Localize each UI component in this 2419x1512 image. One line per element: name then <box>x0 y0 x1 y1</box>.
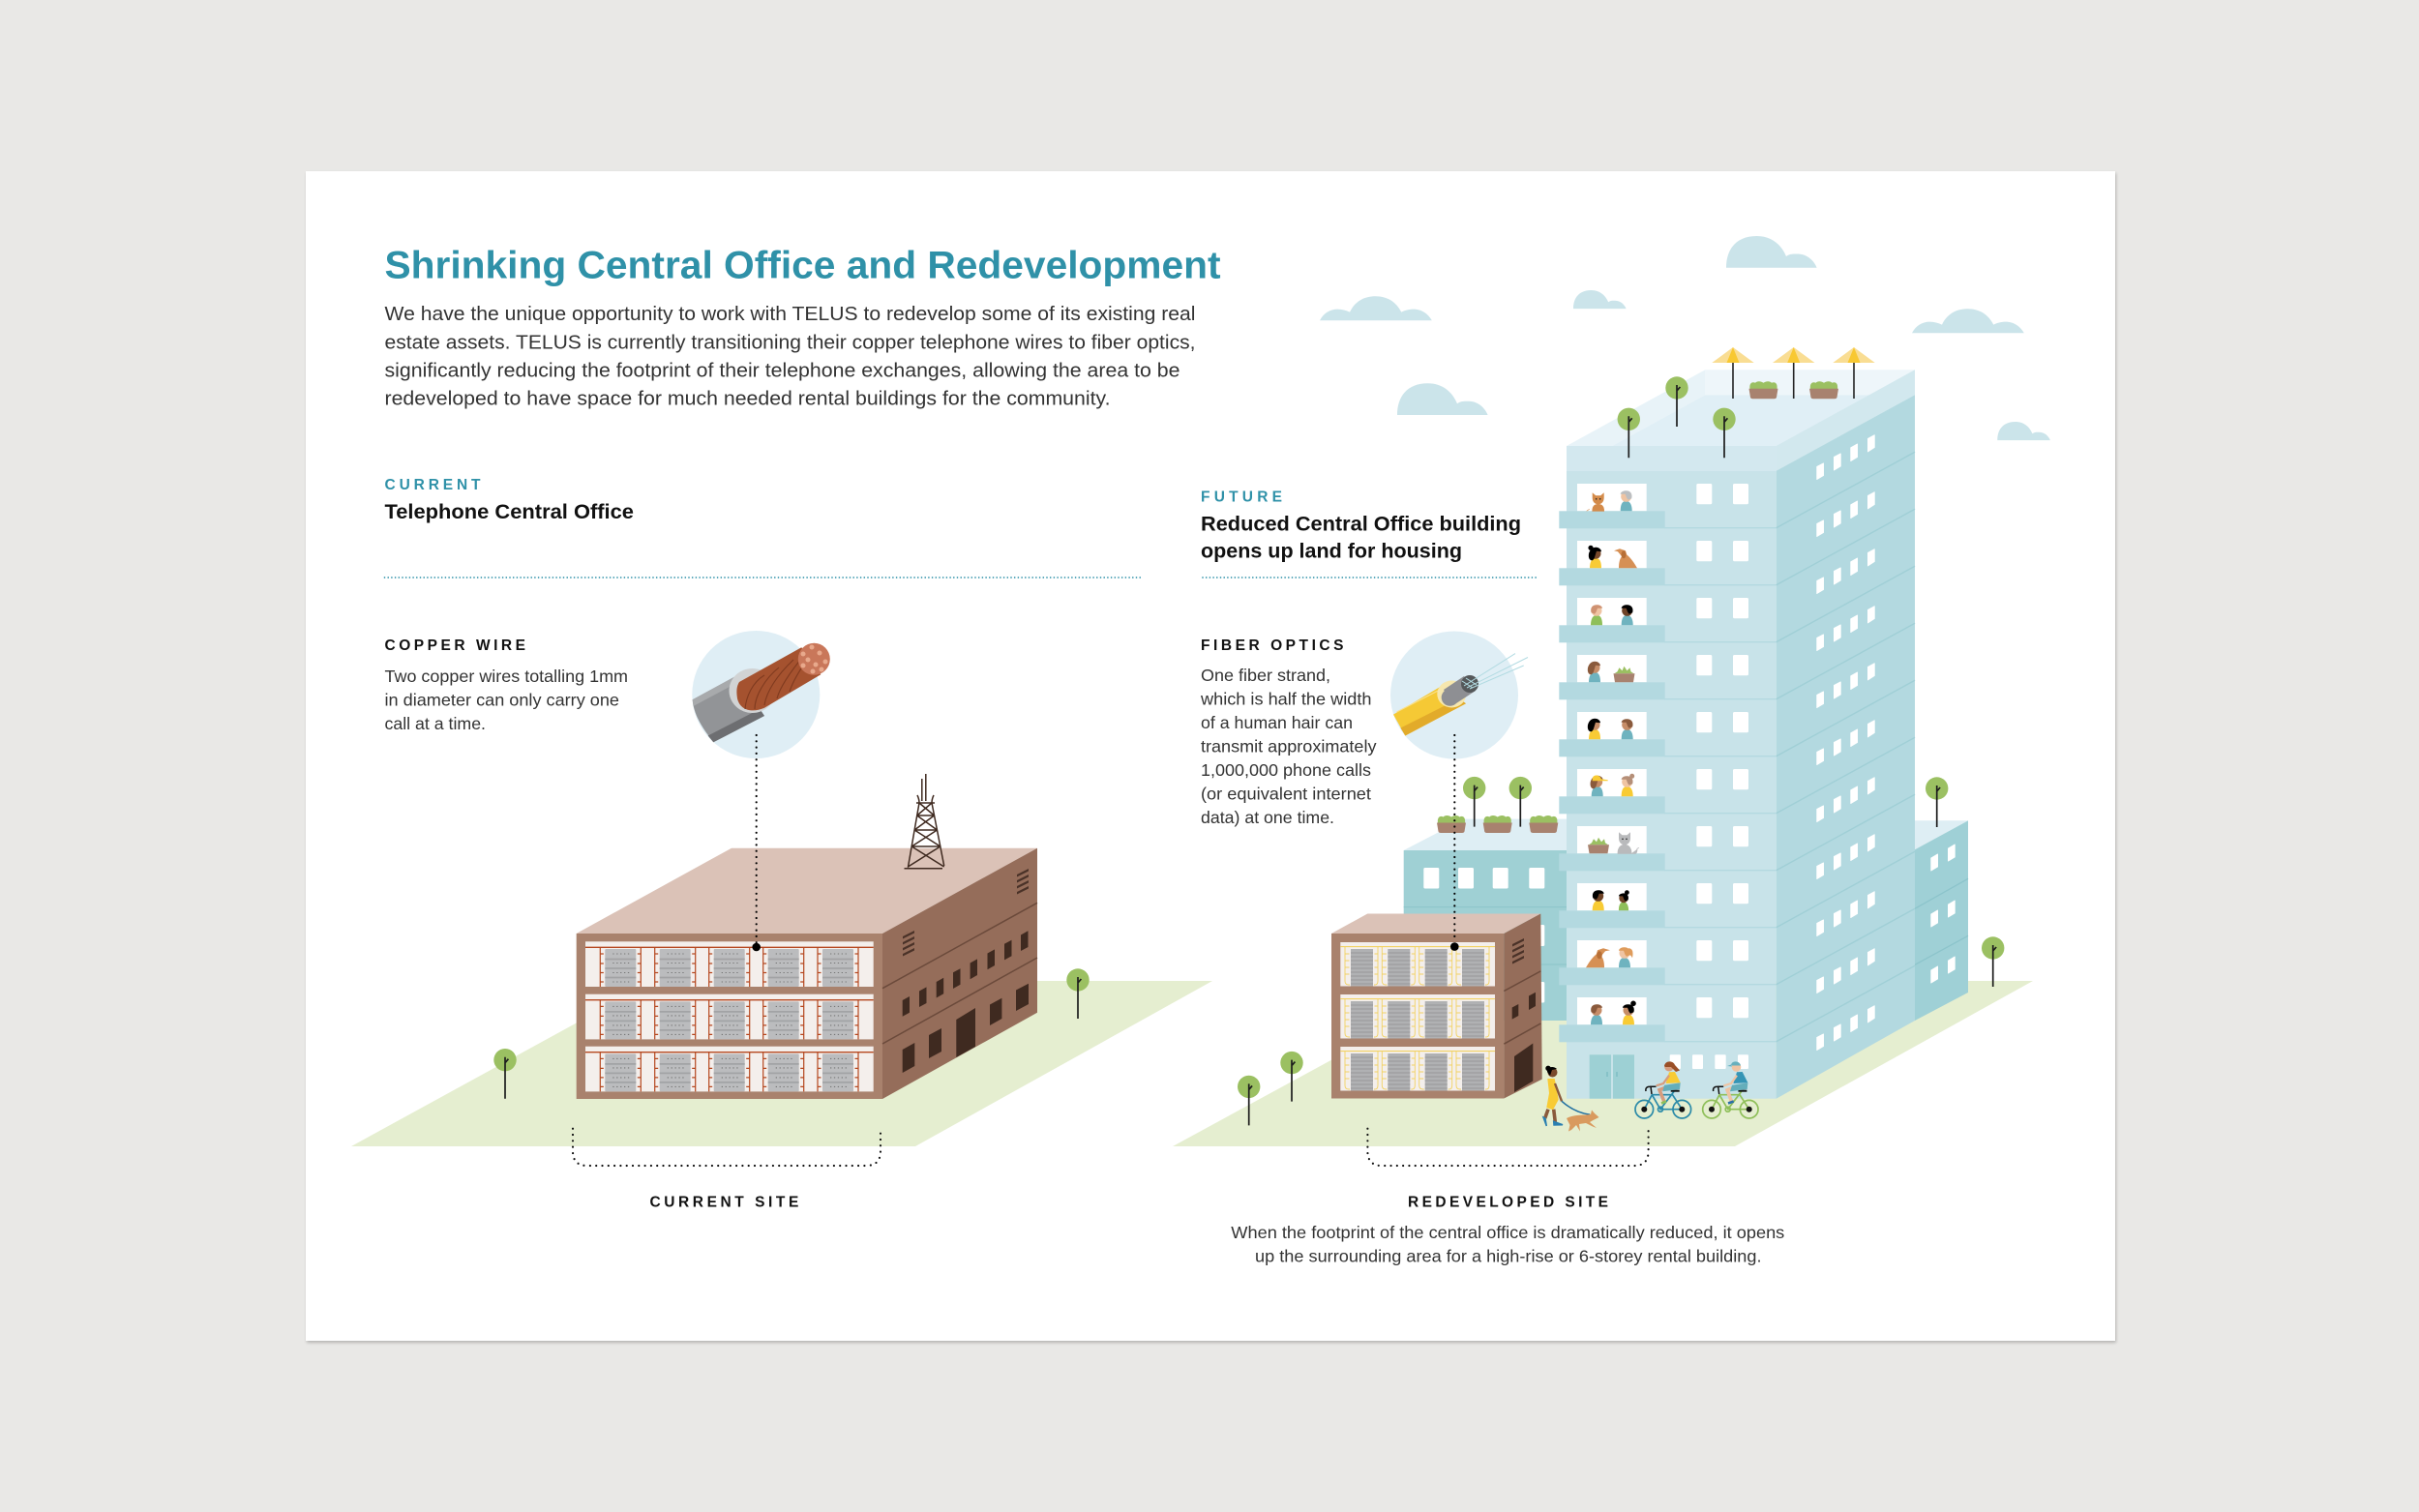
umbrellas <box>1712 347 1875 399</box>
heading: future: opens up land for housing <box>1201 540 1462 563</box>
rooftop trees and planters <box>1437 777 1558 833</box>
balcony 6: woman with cap and woman with bun <box>1591 774 1634 796</box>
balcony 10: two people <box>1591 1000 1636 1024</box>
tower rooftop furniture <box>1618 347 1875 458</box>
bracket: redeveloped site <box>1367 1129 1649 1166</box>
title: Shrinking Central Office and Redevelopment <box>385 244 1221 286</box>
label: current site: CURRENT SITE <box>650 1195 798 1211</box>
tower side wall <box>1777 395 1915 1099</box>
text block: fiber optics: (or equivalent internet <box>1201 784 1371 803</box>
annex building <box>1915 820 1968 1021</box>
divider: current <box>385 577 1143 578</box>
text block: fiber optics: FIBER OPTICS <box>1201 637 1343 654</box>
intro paragraph <box>385 303 1196 410</box>
text block: copper wire: Two copper wires totalling 1mm <box>385 667 628 686</box>
tower ground floor windows <box>1670 1054 1748 1069</box>
heading: future: Reduced Central Office building <box>1201 513 1521 536</box>
trees: redeveloped site left <box>1238 1052 1303 1125</box>
icon: antenna tower <box>904 774 944 869</box>
text block: fiber optics <box>1200 637 1377 827</box>
trees: right of tower <box>1926 777 2004 987</box>
tower front wall <box>1567 471 1777 1099</box>
label: redeveloped site: When the footprint of the central office is dramatically reduced, it opens <box>1231 1223 1785 1242</box>
text block: fiber optics: data) at one time. <box>1201 808 1334 827</box>
side vent and windows <box>1512 938 1536 1092</box>
balcony 7: plant and grey cat <box>1588 832 1639 853</box>
building front wall <box>577 934 882 1099</box>
rooftop trees <box>1618 376 1736 458</box>
telephone equipment racks <box>585 941 874 1091</box>
reduced central office building <box>1331 913 1542 1099</box>
ground: current site <box>351 981 1212 1146</box>
text block: fiber optics: which is half the width <box>1200 689 1372 708</box>
panel: white card <box>306 171 2115 1341</box>
intro paragraph: redeveloped to have space for much needed rental buildings for the community. <box>385 387 1111 410</box>
label: redeveloped site: up the surrounding area for a high-rise or 6-storey rental building. <box>1255 1246 1761 1265</box>
label: redeveloped site: REDEVELOPED SITE <box>1408 1195 1608 1211</box>
balcony 9: dog and woman with ponytail <box>1586 947 1633 967</box>
text block: fiber optics: of a human hair can <box>1201 713 1353 732</box>
intro paragraph: significantly reducing the footprint of their telephone exchanges, allowing the area to be <box>385 360 1180 381</box>
mid-rise building (back) <box>1404 777 1567 1021</box>
heading: current: Telephone Central Office <box>385 501 634 523</box>
rooftop planters <box>1749 381 1838 399</box>
balcony 4: woman and plant <box>1588 662 1635 682</box>
balcony 5: two people <box>1588 719 1633 739</box>
tower roof deck <box>1567 370 1915 471</box>
text block: fiber optics: One fiber strand, <box>1201 666 1330 685</box>
heading: current <box>385 477 634 523</box>
icon: copper wire <box>692 631 830 758</box>
tower entrance doors <box>1590 1054 1634 1099</box>
ground: redeveloped site <box>1173 981 2033 1146</box>
balcony residents <box>1586 490 1639 1024</box>
side vents <box>903 869 1029 956</box>
tower front windows <box>1696 484 1748 1018</box>
text block: copper wire: COPPER WIRE <box>385 637 525 654</box>
intro paragraph: We have the unique opportunity to work with TELUS to redevelop some of its existing real <box>385 303 1196 325</box>
person walking a dog <box>1543 1066 1598 1132</box>
reduced building front wall <box>1331 934 1504 1099</box>
tower balconies <box>1559 484 1665 1042</box>
building side wall <box>882 848 1037 1099</box>
bracket: current site <box>573 1129 881 1166</box>
balcony 2: woman and dog <box>1588 546 1637 568</box>
text block: fiber optics: 1,000,000 phone calls <box>1201 760 1371 780</box>
cyclist with teal bike <box>1635 1061 1691 1118</box>
text block: copper wire <box>385 637 628 733</box>
icon: fiber optic cable <box>1390 631 1528 758</box>
callout line: fiber <box>1450 735 1459 951</box>
side windows and door <box>903 931 1029 1073</box>
reduced building roof <box>1331 913 1540 934</box>
clouds <box>1320 236 2050 440</box>
heading: current: CURRENT <box>385 477 481 493</box>
text block: fiber optics: transmit approximately <box>1201 737 1377 756</box>
fiber equipment racks <box>1340 942 1495 1091</box>
cyclist with green bike <box>1703 1061 1758 1118</box>
callout line: copper wire <box>752 735 761 951</box>
building roof <box>577 848 1037 934</box>
heading: future <box>1201 489 1521 563</box>
tower side windows <box>1817 435 1874 1051</box>
heading: future: FUTURE <box>1201 489 1282 505</box>
reduced building side wall <box>1504 913 1542 1099</box>
text block: copper wire: call at a time. <box>385 714 486 733</box>
label: redeveloped site <box>1231 1195 1785 1265</box>
trees: current site <box>493 968 1090 1099</box>
divider: future <box>1203 577 1538 578</box>
balcony 8: two people <box>1593 890 1629 910</box>
rental tower <box>1559 370 1915 1099</box>
intro paragraph: estate assets. TELUS is currently transitioning their copper telephone wires to fiber optics, <box>385 331 1196 354</box>
balcony 1: cat and grey-haired person <box>1587 490 1632 511</box>
balcony 3: two people <box>1591 605 1633 625</box>
text block: copper wire: in diameter can only carry one <box>385 691 619 710</box>
current building <box>577 848 1037 1099</box>
